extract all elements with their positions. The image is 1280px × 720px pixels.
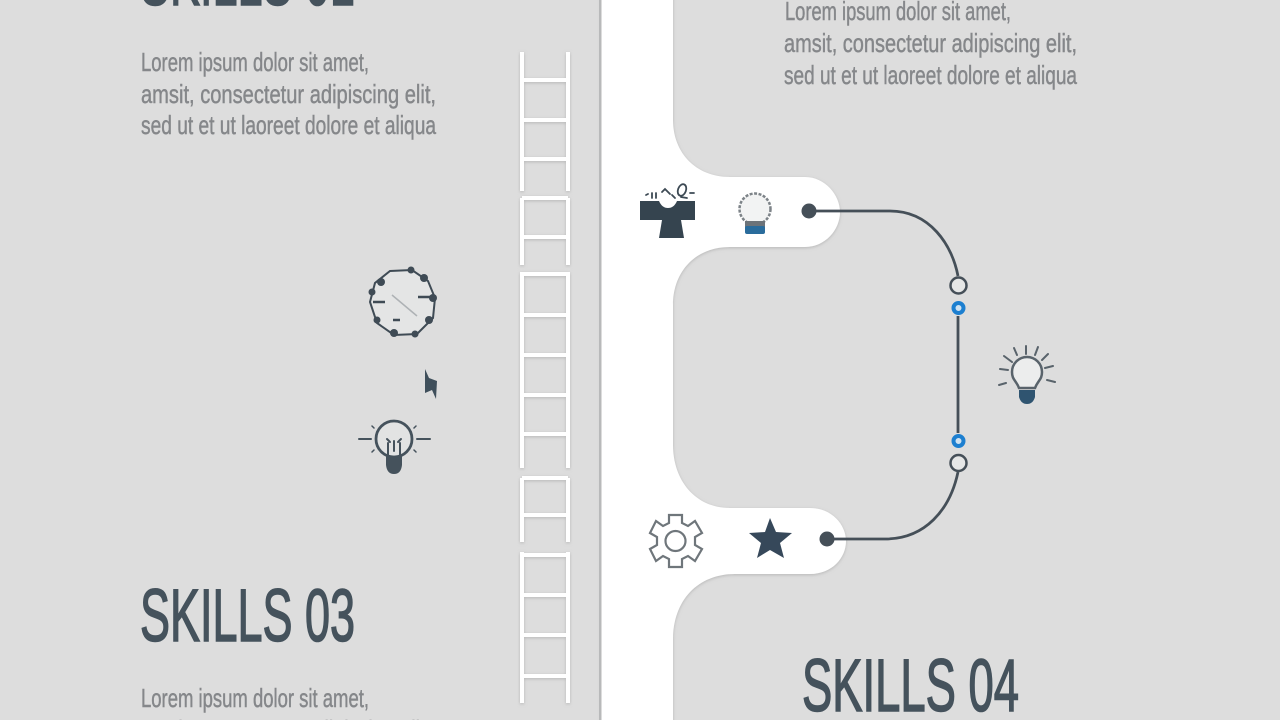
text block: skills 01: amsit, consectetur adipiscing elit,	[141, 79, 436, 109]
text block: skills 02: sed ut et ut laoreet dolore et aliqua	[784, 60, 1077, 90]
ladder	[520, 52, 570, 703]
icon: gear	[650, 515, 702, 567]
icon: bulb with arrows	[359, 421, 430, 474]
icon: broken t block	[640, 183, 695, 238]
text block: skills 02	[784, 0, 1077, 90]
text block: skills 02: amsit, consectetur adipiscing elit,	[784, 28, 1077, 58]
text block: skills 03: Lorem ipsum dolor sit amet,	[141, 683, 369, 713]
heading: skills 03: SKILLS 03	[140, 574, 355, 657]
connector: top and bottom tabs	[802, 204, 966, 546]
icon: bulb in top tab	[740, 194, 770, 234]
text block: skills 01: sed ut et ut laoreet dolore et aliqua	[141, 110, 436, 140]
icon: lightning bolt	[425, 369, 437, 399]
icon: star	[749, 518, 792, 558]
white path band with tabs	[599, 0, 846, 720]
text block: skills 01: Lorem ipsum dolor sit amet,	[141, 47, 369, 77]
text block: skills 01	[141, 47, 436, 140]
icon: network circle	[368, 266, 437, 338]
icon: idea bulb	[999, 346, 1055, 404]
